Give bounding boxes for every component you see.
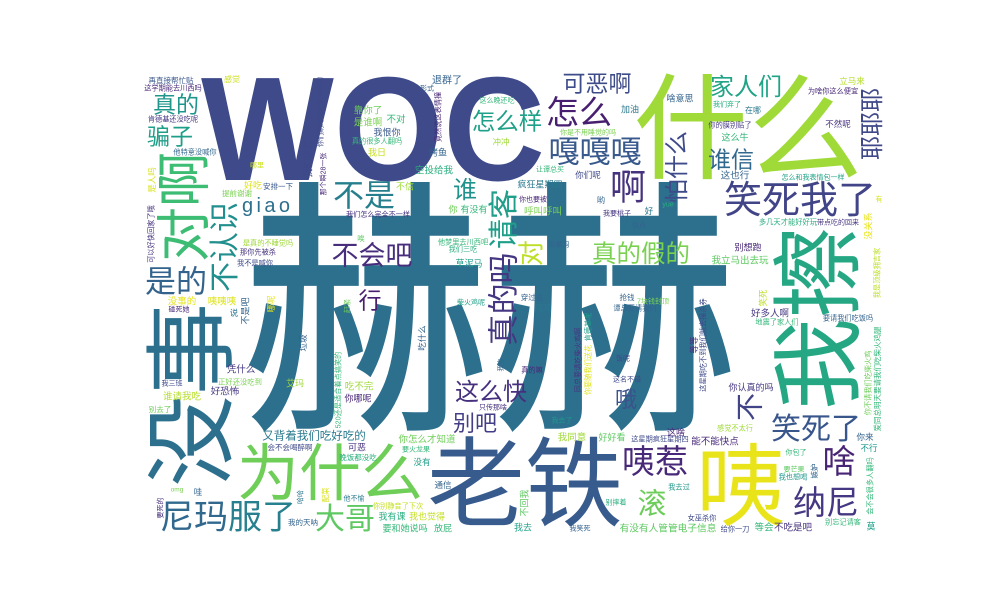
word: 赶紧: 赶紧	[343, 299, 352, 313]
word: 你怎么才知道: 你怎么才知道	[398, 434, 456, 446]
word: 肯德基还没吃呢: 肯德基还没吃呢	[148, 115, 198, 124]
word: 好恐怖: 好恐怖	[211, 386, 240, 398]
word: 你的膜别贴了: 你的膜别贴了	[708, 121, 752, 130]
word: 请客: 请客	[488, 189, 521, 249]
word: 吃不完: 吃不完	[345, 381, 374, 393]
word: 谁信: 谁信	[708, 147, 754, 173]
word: 可恶啊: 可恶啊	[562, 71, 632, 97]
word: 快点: 快点	[632, 221, 646, 230]
word: 对: 对	[517, 240, 547, 266]
word: 这名不错: 这名不错	[613, 375, 641, 384]
word: 等等: 等等	[689, 336, 699, 354]
word: 怎么和我表情包一样: 怎么和我表情包一样	[782, 173, 844, 182]
word: 穿过去: 穿过去	[521, 292, 544, 302]
word: 这星期疯狂星期四: 这星期疯狂星期四	[631, 435, 689, 444]
word: 我去: 我去	[514, 521, 532, 532]
word: 立马来: 立马来	[839, 76, 865, 86]
word: 为啥你这么便宜: 为啥你这么便宜	[808, 87, 858, 96]
word: 咦咦咦: 咦咦咦	[208, 296, 237, 308]
word: 不是吧: 不是吧	[240, 297, 250, 325]
word: 疯狂星期四: 疯狂星期四	[517, 178, 563, 189]
word: 没关系: 没关系	[862, 212, 873, 240]
word: 我立马出去玩: 我立马出去玩	[711, 255, 769, 267]
word: 我们弃了: 我们弃了	[713, 100, 741, 109]
word: 是谁啊: 是谁啊	[354, 118, 383, 129]
word: 要请我们吃饭吗: 要请我们吃饭吗	[823, 314, 873, 323]
word: 哈哈: 哈哈	[296, 490, 305, 504]
word: 有: 有	[876, 195, 882, 204]
word: 没事: 没事	[142, 303, 244, 487]
word: 海螺沟: 海螺沟	[548, 240, 570, 249]
word: 这么牛: 这么牛	[721, 131, 749, 142]
word: 啊: 啊	[610, 166, 646, 207]
word: 你哪呢: 你哪呢	[344, 392, 372, 403]
word: 家人们: 家人们	[710, 74, 782, 101]
word: 赫赫: 赫赫	[242, 165, 738, 465]
word: yue: yue	[662, 202, 674, 209]
word: 艾玛: 艾玛	[286, 378, 304, 388]
word: 我恨你: 我恨你	[373, 126, 401, 137]
word: 有没有: 有没有	[460, 203, 488, 214]
word: 在哪: 在哪	[745, 105, 761, 115]
word: 那个瞬28一张: 那个瞬28一张	[319, 153, 328, 195]
word: 感觉: 感觉	[224, 74, 240, 84]
word: 说: 说	[230, 308, 239, 318]
word: 有没有人管管电子信息: 有没有人管管电子信息	[620, 522, 717, 535]
word: 别吧: 别吧	[453, 411, 497, 436]
word: 这星期吃不到我们就去撞杀券: 这星期吃不到我们就去撞杀券	[699, 298, 708, 392]
word: 真的假的: 真的假的	[592, 240, 690, 268]
word: 你也要被: 你也要被	[519, 195, 547, 204]
word: 唉: 唉	[357, 233, 365, 243]
word: 形式: 形式	[420, 84, 434, 93]
word: 你来: 你来	[856, 432, 874, 442]
word: 不对: 不对	[386, 114, 406, 126]
word: 谭总要请我们: 谭总要请我们	[613, 304, 657, 313]
word: omg: omg	[171, 486, 184, 493]
word: 呵呵: 呵呵	[534, 303, 552, 313]
word: 给你一刀: 给你一刀	[721, 525, 749, 534]
word: 要芒果: 要芒果	[784, 465, 804, 474]
word: 老铁: 老铁	[427, 429, 623, 539]
word: 晚饭都没吃: 晚饭都没吃	[339, 452, 377, 462]
word: 纳尼: 纳尼	[793, 484, 859, 521]
word: 我们谭总: 我们谭总	[303, 140, 315, 178]
word: 靠你了: 靠你了	[354, 105, 382, 117]
word: 我有课: 我有课	[378, 510, 406, 521]
word: 可恶: 可恶	[348, 442, 366, 452]
word: 啥意思: 啥意思	[666, 92, 694, 103]
word: 正好还没吃到: 正好还没吃到	[218, 378, 262, 387]
word: 嘎嘎嘎: 嘎嘎嘎	[548, 134, 642, 169]
word: 耶耶耶: 耶耶耶	[859, 88, 886, 160]
word: 我也: 我也	[495, 358, 504, 372]
word: 安排一下: 安排一下	[263, 181, 293, 191]
word: 肯德基呢: 肯德基呢	[584, 313, 593, 341]
word: 又背着我们吃好吃的: 又背着我们吃好吃的	[262, 428, 366, 442]
word: 不回我: 不回我	[519, 489, 529, 517]
word: 他不愉: 他不愉	[344, 494, 364, 503]
word: 多几天才能好好玩: 多几天才能好好玩	[759, 218, 818, 227]
word: 通信: 通信	[434, 480, 452, 490]
word: 同总要请吃柴火鸡啊: 同总要请吃柴火鸡啊	[574, 328, 583, 392]
word: 真的吗: 真的吗	[486, 252, 521, 346]
word: 会不会很多人翻吗: 会不会很多人翻吗	[866, 457, 875, 515]
word: 吃什么: 吃什么	[417, 325, 427, 351]
word: 笑死了: 笑死了	[771, 413, 861, 446]
word: 你别静音了下次: 你别静音了下次	[373, 502, 423, 511]
word: 我们怎么完全不一样: 我们怎么完全不一样	[346, 210, 410, 219]
word: 没事的: 没事的	[168, 296, 196, 308]
word: 好: 好	[645, 206, 654, 216]
word: 我笑死: 我笑死	[570, 524, 590, 533]
word: 好好看: 好好看	[598, 431, 626, 442]
word: 柴火鸡呢: 柴火鸡呢	[457, 298, 485, 307]
word: 碰死她: 碰死她	[168, 305, 190, 314]
word: 是真的不睡觉吗: 是真的不睡觉吗	[243, 239, 293, 248]
word: 7块钱封顶: 7块钱封顶	[637, 297, 669, 306]
word: 不吃是吧: 不吃是吧	[774, 522, 812, 534]
word: 要和她说吗: 要和她说吗	[382, 522, 428, 533]
word: 不会吧: 不会吧	[332, 241, 412, 271]
word: 你们期的围栏是这样的: 你们期的围栏是这样的	[316, 77, 325, 147]
word: 不信: 不信	[396, 180, 414, 191]
word: 怎么样: 怎么样	[472, 109, 542, 135]
word: 这么快: 这么快	[455, 379, 527, 406]
word: giao: giao	[242, 195, 290, 217]
word: 要死的: 要死的	[156, 498, 165, 518]
word: 不然呢: 不然呢	[825, 119, 851, 129]
word: 烤鱼: 烤鱼	[429, 146, 447, 157]
word: 哪呢: 哪呢	[266, 295, 276, 313]
word: 我也想喝: 我也想喝	[779, 473, 807, 482]
word: 再直接帮忙贴: 再直接帮忙贴	[148, 75, 194, 85]
word: 大哥: 大哥	[315, 503, 375, 536]
word: 不认识: 不认识	[209, 202, 242, 292]
word: 放屁: 放屁	[434, 522, 452, 533]
word: 你要随我们送花: 你要随我们送花	[584, 345, 593, 395]
word: 退群了: 退群了	[432, 74, 462, 87]
word: 草泥马: 草泥马	[455, 257, 483, 268]
word: 真的嘛: 真的嘛	[521, 366, 543, 375]
word: 笑死: 笑死	[758, 289, 768, 307]
word: 我也觉得: 我也觉得	[409, 510, 445, 521]
word: 你: 你	[448, 203, 458, 214]
word: 别去了: 别去了	[149, 404, 171, 414]
word: 我是顶级拥言家: 我是顶级拥言家	[873, 248, 882, 298]
word: 等会: 等会	[754, 522, 774, 534]
word: 哟: 哟	[597, 195, 605, 205]
word: 感觉不太行: 感觉不太行	[717, 424, 753, 433]
word: 嫉妒: 嫉妒	[809, 464, 819, 478]
word: 这啥: 这啥	[667, 426, 685, 437]
word: 空投给我: 空投给我	[415, 165, 453, 177]
word: 我不是喊你: 我不是喊你	[237, 259, 273, 268]
word: 我的天呐: 我的天呐	[288, 517, 318, 527]
word: 真的很多人翻吗: 真的很多人翻吗	[352, 137, 402, 146]
word: 不: 不	[734, 393, 765, 421]
word: 怕什么: 怕什么	[664, 131, 691, 203]
word: 那你先被杀: 那你先被杀	[240, 248, 276, 257]
word: 哪里: 哪里	[250, 161, 264, 170]
word: 你认真的吗: 你认真的吗	[728, 381, 774, 392]
word: 能不能快点: 能不能快点	[691, 436, 739, 448]
word: 谁: 谁	[453, 177, 477, 204]
word: 不行: 不行	[860, 443, 878, 453]
word: 谭总明天要请我们吃柴火鸡腿: 爱同总明天要请我们吃柴火鸡腿	[872, 326, 882, 432]
word: 是的: 是的	[145, 264, 207, 299]
word: 我去了: 我去了	[552, 416, 572, 425]
word: 哇: 哇	[194, 487, 203, 497]
word: 我们三吃: 我们三吃	[449, 245, 477, 254]
word: WOC: WOC	[201, 47, 545, 212]
word: 我擦: 我擦	[769, 226, 871, 410]
word: 真的: 真的	[153, 92, 199, 118]
word: 行: 行	[358, 288, 382, 314]
word: 谁请我吃: 谁请我吃	[163, 391, 201, 403]
word: 会不会喝醉啊: 会不会喝醉啊	[268, 442, 313, 452]
word: 这也行: 这也行	[721, 170, 750, 182]
word: 520还是适合着点搞笑的: 520还是适合着点搞笑的	[334, 352, 343, 428]
word: 咦: 咦	[696, 438, 786, 538]
word: 啥: 啥	[822, 443, 856, 480]
word: 他特意没喊你: 他特意没喊你	[173, 148, 217, 157]
word: 莫: 莫	[866, 520, 876, 531]
word: 我同意: 我同意	[558, 432, 586, 444]
word: 没有: 没有	[413, 457, 431, 467]
word: 你不请我们吃柴火鸡: 你不请我们吃柴火鸡	[864, 351, 873, 415]
word: 你包了: 你包了	[786, 448, 806, 457]
word: 哦: 哦	[615, 387, 637, 412]
word: 可以好快回家了: 可以好快回家了哦	[147, 205, 156, 263]
word: 配菜: 配菜	[320, 487, 330, 502]
word: 别忘记请客: 别忘记请客	[825, 518, 861, 527]
word: 我三班: 我三班	[162, 379, 182, 388]
word: 这么晚还吃: 这么晚还吃	[480, 96, 514, 105]
word: 要火龙果: 要火龙果	[402, 445, 430, 454]
word: 他梦里去川西吧: 他梦里去川西吧	[438, 238, 488, 247]
word: 尼玛: 尼玛	[160, 499, 228, 537]
word: 对啊: 对啊	[153, 152, 215, 262]
word: 为什么: 为什么	[237, 440, 423, 509]
word: 别摔着: 别摔着	[606, 498, 626, 507]
word: 加油: 加油	[621, 103, 639, 114]
word: 我日: 我日	[368, 147, 386, 157]
word: 滚: 滚	[637, 488, 667, 521]
word: 冲冲: 冲冲	[492, 137, 510, 147]
word: 垃圾: 垃圾	[298, 334, 308, 352]
word: 你是不用睡觉的吗: 你是不用睡觉的吗	[560, 128, 616, 137]
word: 女巫杀你: 女巫杀你	[688, 514, 716, 523]
word: 地震了家人们: 地震了家人们	[755, 318, 799, 327]
word: 只传那啥: 只传那啥	[479, 403, 507, 412]
word: 我要桃子: 我要桃子	[603, 209, 631, 218]
word: 你们呢: 你们呢	[575, 170, 601, 180]
word: 我去过: 我去过	[668, 483, 690, 492]
word: 呼叫呼叫: 呼叫呼叫	[524, 207, 562, 218]
word: 饭呢: 饭呢	[616, 354, 630, 363]
word: 骗子: 骗子	[147, 124, 193, 150]
word: 好吃: 好吃	[244, 179, 262, 190]
word: 笑死我了: 笑死我了	[724, 180, 876, 222]
word: 别想跑: 别想跑	[734, 241, 762, 252]
word: 什么: 什么	[633, 67, 863, 195]
word: 咦惹: 咦惹	[622, 443, 688, 480]
word: 凭什么: 凭什么	[227, 364, 255, 376]
word: 让谭总买: 让谭总买	[536, 165, 564, 174]
word: 竟然说这表情撞: 竟然说这表情撞	[434, 92, 443, 142]
word: 服了: 服了	[228, 499, 296, 537]
word: 怎么: 怎么	[546, 94, 612, 131]
word: 这学期能去川西吗: 这学期能去川西吗	[144, 84, 202, 93]
word: 抢钱: 抢钱	[620, 292, 635, 302]
word: 带点吃的回来: 带点吃的回来	[817, 218, 859, 227]
word: 不是: 不是	[333, 178, 395, 213]
word: 是人吗: 是人吗	[147, 167, 157, 193]
word: 提前谢谢: 提前谢谢	[222, 188, 252, 198]
word: 好多人啊: 好多人啊	[751, 308, 789, 320]
